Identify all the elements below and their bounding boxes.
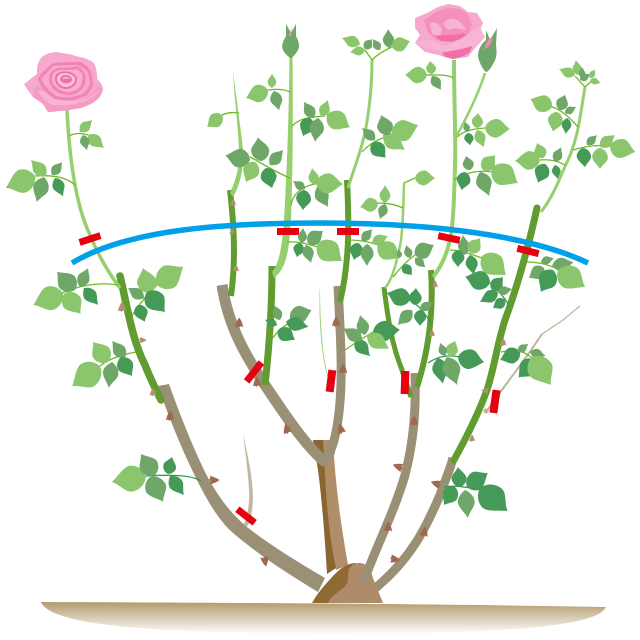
thorns	[118, 198, 506, 567]
leaf cluster: mid shoots left	[224, 136, 290, 190]
leaf cluster: small shoot top	[404, 170, 435, 186]
cane: second grey	[222, 285, 330, 466]
leaf cluster: centre left	[291, 167, 343, 210]
green canes	[120, 180, 537, 460]
leaf cluster: left of first green cane	[29, 265, 118, 320]
leaf cluster: right rose top	[405, 60, 454, 93]
leaf cluster: dark right lower	[463, 267, 513, 313]
root crown	[312, 563, 383, 603]
leaf cluster: right shoot upper	[527, 91, 578, 134]
leaf cluster: right rose stem middle	[454, 151, 524, 199]
light green shoots	[67, 57, 585, 390]
ground	[41, 602, 606, 634]
leaf cluster: left rose lower	[1, 155, 75, 204]
leaf cluster: top of centre shoot	[340, 29, 412, 60]
leaf cluster: dark centre right	[384, 284, 435, 329]
leaf cluster: under blue line right	[450, 234, 513, 284]
leaf cluster: below left rose	[69, 116, 108, 153]
leaf cluster: low right	[437, 465, 516, 521]
thin dead sucker right	[484, 306, 580, 414]
cane: far left grey	[158, 384, 325, 592]
leaf cluster: upper centre left	[292, 98, 355, 143]
leaf cluster: lower centre left	[264, 302, 315, 346]
trunk	[313, 440, 348, 574]
leaf cluster: under blue line centre	[348, 226, 405, 266]
leaf cluster: right shoot top	[557, 60, 601, 87]
leaf cluster: right of first green cane	[125, 257, 190, 324]
rosebud right	[478, 28, 497, 72]
cane: right grey	[373, 458, 453, 590]
leaf cluster: low left	[110, 449, 201, 507]
red cut marks	[78, 228, 540, 526]
rosebud left	[282, 24, 299, 58]
leaf cluster: under blue line centre left	[287, 225, 349, 270]
thin dead sucker left	[243, 434, 253, 527]
leaf cluster: right shoot lower left	[515, 141, 565, 185]
leaf cluster: bud fork	[457, 113, 510, 149]
leaf cluster: mid left	[65, 336, 139, 397]
leaf cluster: centre shoot middle	[359, 113, 422, 163]
leaf cluster: by dead sucker	[497, 341, 561, 392]
cane: inner right grey	[360, 373, 415, 584]
rose right	[415, 4, 485, 59]
rose left	[24, 52, 103, 112]
leaf cluster: under blue line far right	[525, 254, 591, 297]
leaf cluster: mid right	[428, 339, 486, 388]
blue pruning height line	[72, 223, 588, 263]
leaf cluster: lower centre	[340, 314, 401, 361]
leaf: top shoot single	[203, 109, 239, 132]
leaf cluster: beneath bud stem	[243, 74, 290, 112]
leaf cluster: small shoot middle	[359, 185, 403, 221]
leaf cluster: right shoot far right	[573, 130, 638, 169]
cane: centre grey	[325, 286, 341, 457]
leaf cluster: small shoot lower	[393, 238, 438, 278]
